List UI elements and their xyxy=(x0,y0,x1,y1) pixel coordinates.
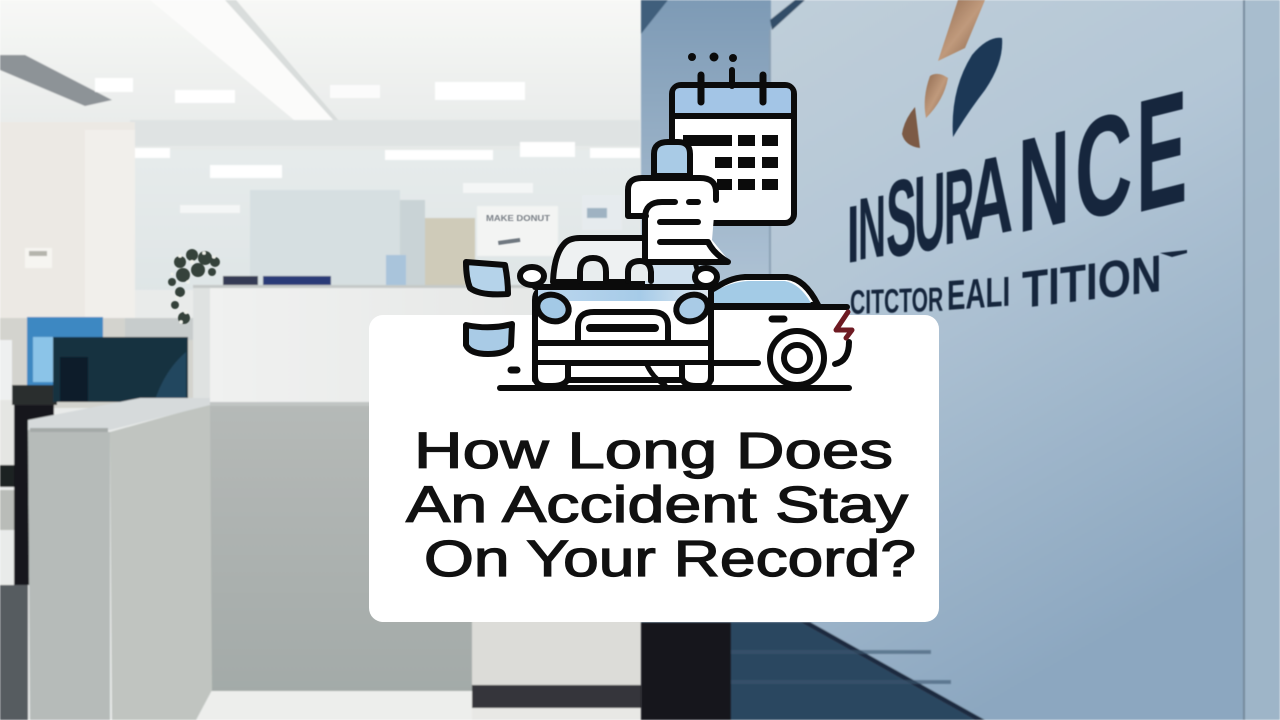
wall sign: INSURANCE: R xyxy=(944,143,974,267)
title xyxy=(406,422,916,587)
wall sign: INSURANCE: N xyxy=(858,177,886,279)
title: On Your Record? xyxy=(424,530,916,587)
background photo: blue insurance wall right half xyxy=(641,0,1280,720)
wall logo mark xyxy=(902,0,1002,148)
wall sign: INSURANCE: U xyxy=(914,149,945,277)
wall sign: INSURANCE: I xyxy=(847,188,859,280)
wall sign: second line: EALI xyxy=(947,268,1010,319)
icon: calendar xyxy=(672,52,794,223)
sign on glass wall xyxy=(486,214,550,245)
ground line xyxy=(500,385,849,391)
title: How Long Does xyxy=(414,422,893,479)
wall sign: INSURANCE: E xyxy=(1136,56,1187,247)
logo: copper pebble xyxy=(925,74,948,118)
panel: title card xyxy=(369,315,939,622)
icon: front car body xyxy=(520,267,717,386)
icon: calendar, notice and crashed cars xyxy=(466,52,852,388)
icon: notice bell and document xyxy=(628,142,730,262)
wall sign: INSURANCE: C xyxy=(1075,79,1132,253)
logo: copper blade xyxy=(938,0,985,61)
wall sign: INSURANCE: S xyxy=(886,154,917,281)
sign on glass wall: MAKE DONUT xyxy=(486,214,550,223)
wall sign: INSURANCE: A xyxy=(968,130,1013,265)
wall sign: INSURANCE: N xyxy=(1018,101,1070,261)
wall sign: second line xyxy=(850,245,1187,321)
logo: copper chip xyxy=(902,107,920,148)
wall sign: second line: CITCTOR xyxy=(850,279,943,321)
icon: flying glass shards xyxy=(466,262,517,370)
icon: front car xyxy=(553,238,705,290)
wall sign: second line: TITION xyxy=(1022,245,1162,320)
title: An Accident Stay xyxy=(406,476,909,533)
icon: potted plant xyxy=(168,249,220,324)
background photo: office interior left half xyxy=(0,0,642,720)
icon: rear sedan xyxy=(713,277,852,385)
wall sign: INSURANCE xyxy=(847,56,1187,281)
logo: navy blade xyxy=(953,38,1002,137)
